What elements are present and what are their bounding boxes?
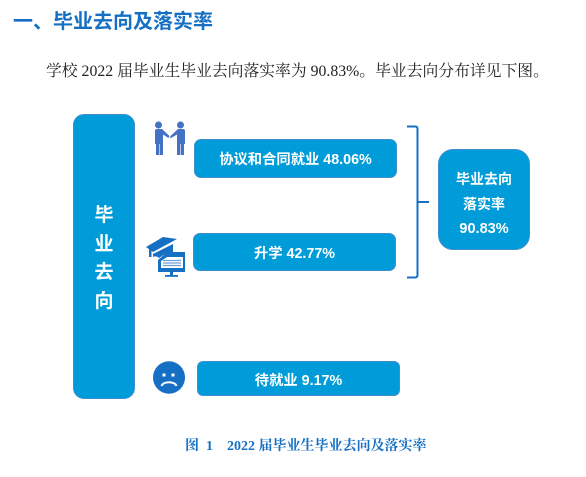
box: further study: 升学 42.77%: [254, 246, 335, 262]
box: awaiting employment: [197, 361, 400, 396]
icon: handshake: [155, 122, 185, 155]
icon: graduation cap and monitor: [146, 237, 185, 277]
box: further study: [193, 233, 396, 271]
bracket arrow: [407, 126, 429, 278]
figure caption: 图 1 2022 届毕业生毕业去向及落实率: [185, 439, 426, 454]
panel: left category bar: 去: [94, 262, 114, 283]
heading: 一、毕业去向及落实率: [13, 11, 213, 33]
panel: overall rate: 90.83%: [459, 221, 509, 237]
box: contract employment: [194, 139, 397, 178]
panel: left category bar: 向: [94, 290, 114, 312]
box: awaiting employment: 待就业 9.17%: [255, 373, 342, 389]
panel: overall rate: 落实率: [463, 196, 505, 212]
panel: overall rate: 毕业去向: [456, 171, 512, 187]
panel: left category bar: 业: [94, 234, 114, 254]
intro text: 学校 2022 届毕业生毕业去向落实率为 90.83%。毕业去向分布详见下图。: [46, 63, 549, 80]
box: contract employment: 协议和合同就业 48.06%: [219, 152, 372, 168]
panel: left category bar: 毕: [94, 205, 114, 226]
icon: sad face: [153, 361, 185, 394]
panel: left category bar: [73, 114, 135, 399]
panel: overall rate: [438, 149, 530, 250]
